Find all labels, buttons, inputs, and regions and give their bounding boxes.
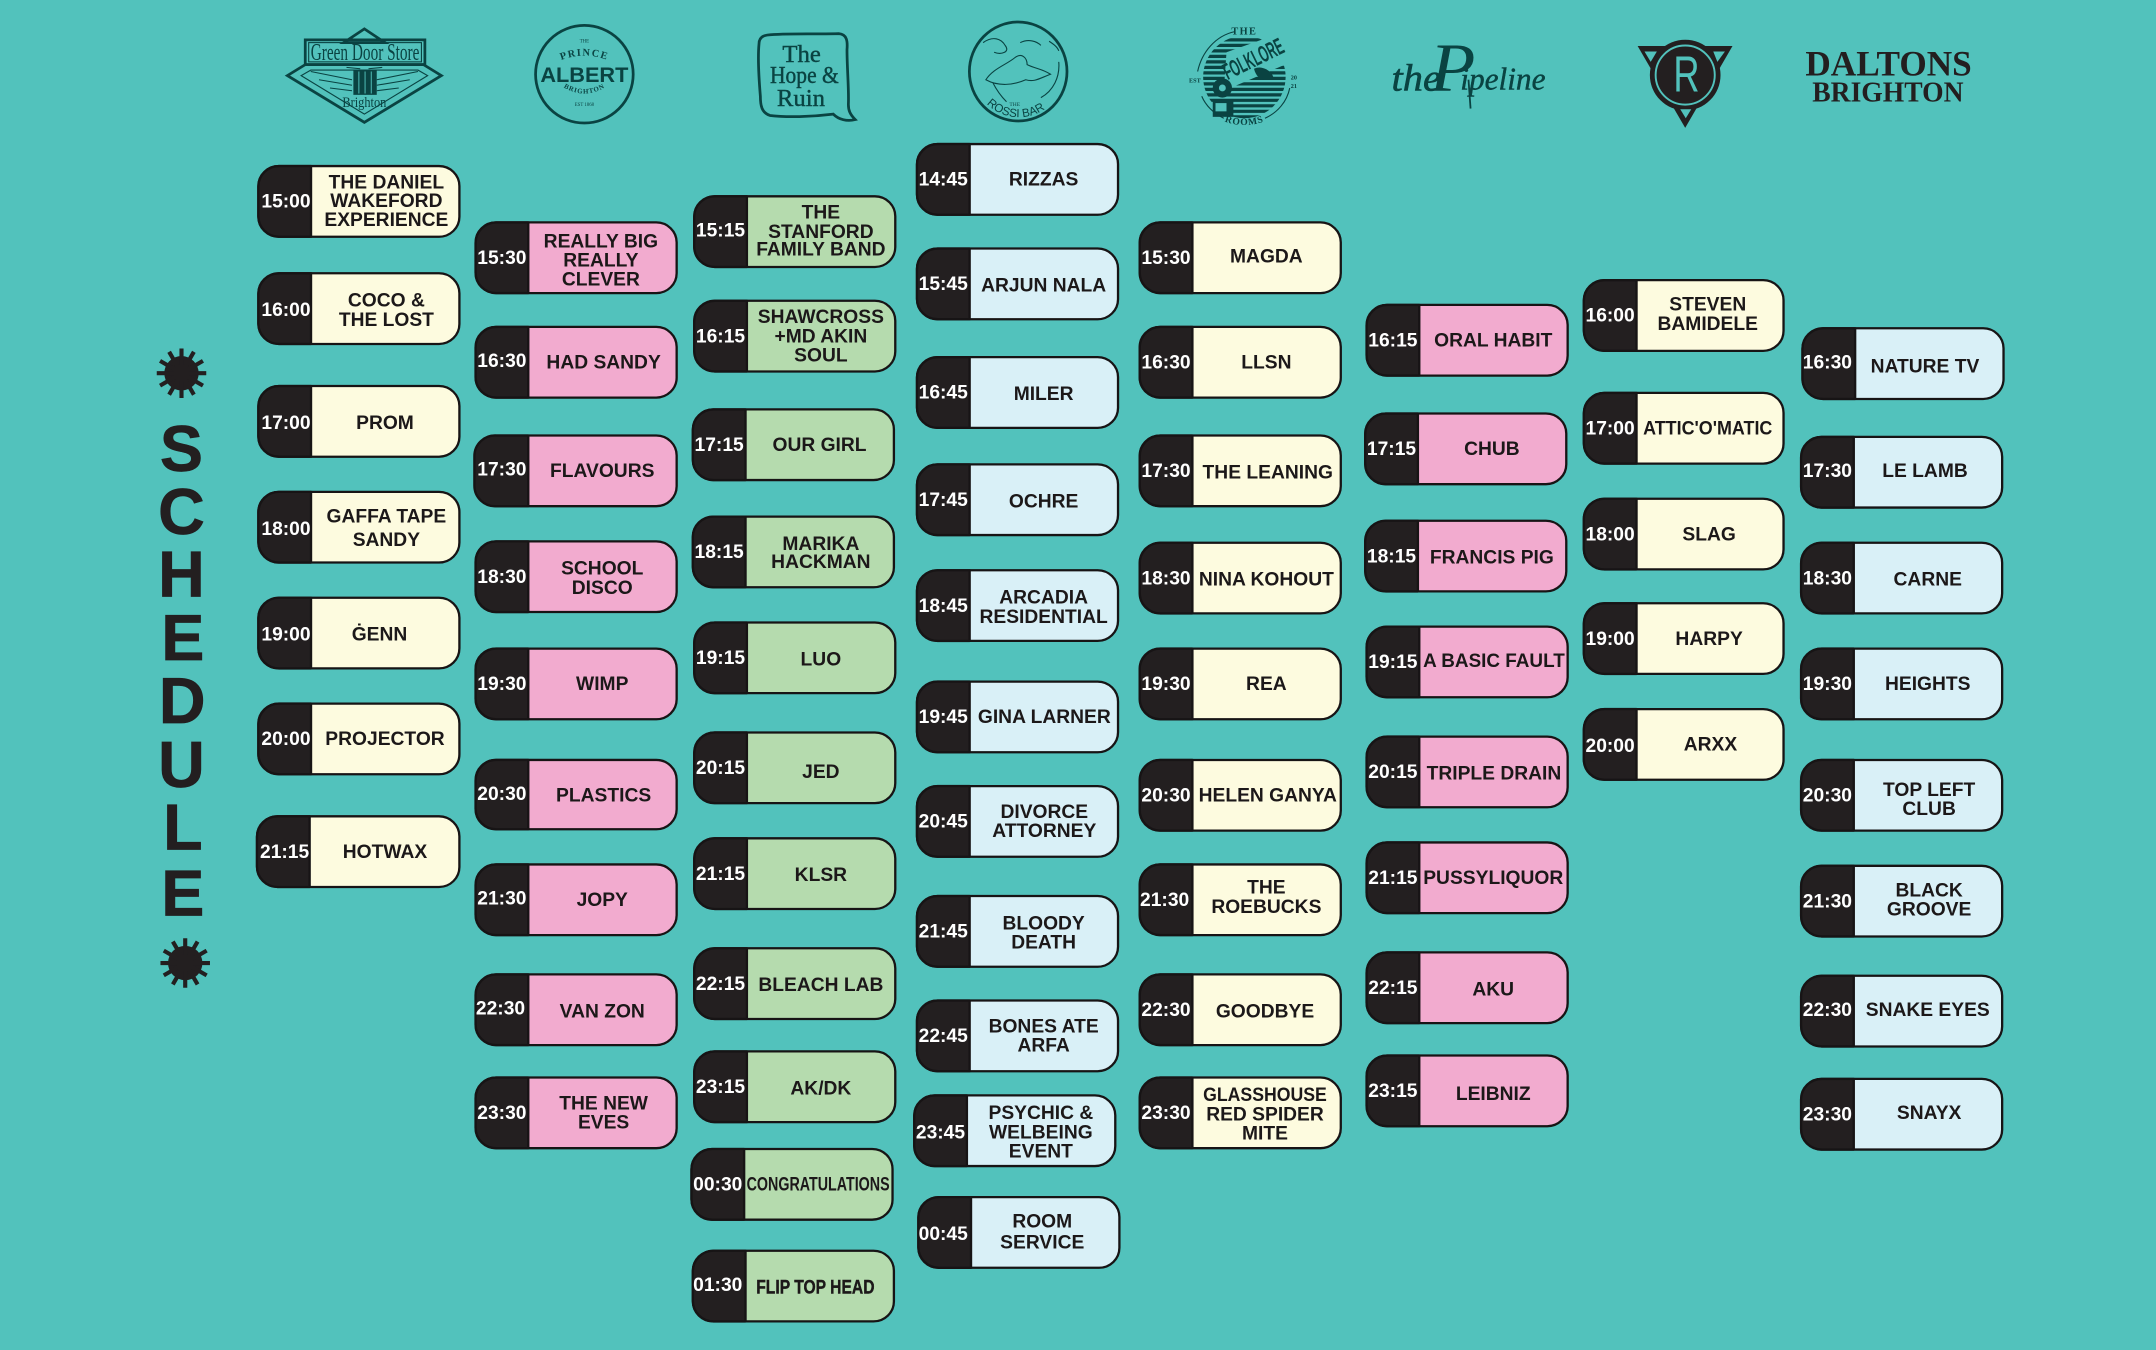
slot 20:00 Arxx <box>1584 709 1784 780</box>
slot 00:45 Room Service: ROOM <box>1012 1212 1072 1233</box>
logo: R triangle: R <box>1673 46 1700 103</box>
slot 18:30 School Disco: DISCO <box>572 578 633 599</box>
slot 22:30 Goodbye: 22:30 <box>1141 1000 1191 1021</box>
slot 16:15 Shawcross +MD Akin Soul: SOUL <box>794 346 848 367</box>
slot 15:00 The Daniel Wakeford Experience <box>258 166 459 237</box>
logo: Prince Albert <box>534 24 635 124</box>
slot 17:30 Le Lamb: 17:30 <box>1803 461 1852 482</box>
slot 22:15 Aku <box>1367 952 1568 1023</box>
slot 18:30 Nina Kohout: NINA KOHOUT <box>1199 570 1334 591</box>
slot 17:15 Our Girl: 17:15 <box>695 435 744 456</box>
slot 23:15 AK/DK: 23:15 <box>696 1077 745 1098</box>
slot 15:00 The Daniel Wakeford Experience: EXPERIENCE <box>324 210 449 231</box>
slot 17:15 Chub: 17:15 <box>1367 439 1416 460</box>
slot 01:30 Flip Top Head: 01:30 <box>693 1275 742 1296</box>
icon: bottom sun <box>160 938 210 988</box>
slot 17:00 Attic'O'Matic: 17:00 <box>1586 418 1635 439</box>
slot 17:15 Chub: CHUB <box>1464 439 1520 460</box>
slot 17:30 Flavours <box>474 435 677 506</box>
slot 15:30 Magda <box>1140 222 1341 293</box>
logo: The Folklore Rooms: EST <box>1189 77 1202 84</box>
logo: The Hope & Ruin <box>758 34 855 120</box>
slot 16:30 Had Sandy: 16:30 <box>477 351 526 372</box>
slot 18:00 Slag: 18:00 <box>1586 524 1635 545</box>
column: R venue <box>1584 280 1784 780</box>
slot 16:00 Steven Bamidele: STEVEN <box>1669 295 1746 316</box>
slot 23:30 The New Eves: EVES <box>578 1113 629 1134</box>
slot 17:30 Flavours: FLAVOURS <box>550 461 655 482</box>
slot 22:30 Van Zon: 22:30 <box>476 999 525 1020</box>
slot 23:45 Psychic & Welbeing Event: WELBEING <box>989 1122 1093 1143</box>
slot 23:45 Psychic & Welbeing Event: PSYCHIC & <box>988 1103 1093 1124</box>
slot 22:45 Bones Ate Arfa: 22:45 <box>919 1026 968 1047</box>
slot 19:30 Heights: 19:30 <box>1803 674 1852 695</box>
slot 20:15 Jed: 20:15 <box>696 758 745 779</box>
logo: The Hope & Ruin: Ruin <box>777 85 825 112</box>
slot 19:00 Harpy: HARPY <box>1675 629 1743 650</box>
column: Prince Albert <box>474 222 677 1148</box>
vertical heading: SCHEDULE <box>158 413 206 930</box>
slot 20:45 Divorce Attorney: ATTORNEY <box>992 821 1096 842</box>
slot 15:30 Really Big Really Clever: REALLY BIG <box>544 231 658 252</box>
slot 17:15 Our Girl: OUR GIRL <box>772 435 867 456</box>
logo: Daltons Brighton: DALTONS <box>1805 44 1972 84</box>
slot 19:30 Rea: REA <box>1246 674 1287 695</box>
slot 20:15 Triple Drain: 20:15 <box>1368 762 1418 783</box>
slot 18:30 Carne <box>1801 543 2002 613</box>
slot 20:30 Helen Ganya: 20:30 <box>1141 785 1191 806</box>
slot 20:30 Helen Ganya: HELEN GANYA <box>1199 785 1337 806</box>
slot 16:15 Shawcross +MD Akin Soul <box>694 301 895 371</box>
slot 20:30 Helen Ganya <box>1140 760 1341 831</box>
slot 21:30 Black Groove: BLACK <box>1895 880 1963 901</box>
slot 20:15 Jed: JED <box>802 762 840 783</box>
slot 20:15 Triple Drain <box>1367 737 1568 807</box>
slot 22:30 Snake Eyes <box>1801 976 2002 1046</box>
slot 23:15 AK/DK: AK/DK <box>790 1078 851 1099</box>
slot 21:30 Black Groove <box>1801 866 2002 936</box>
slot 15:15 The Stanford Family Band <box>694 196 895 267</box>
slot 21:15 Pussyliquor <box>1367 842 1568 913</box>
slot 16:15 Shawcross +MD Akin Soul: +MD AKIN <box>774 326 867 347</box>
slot 00:45 Room Service: SERVICE <box>1000 1232 1084 1253</box>
slot 18:45 Arcadia Residential: 18:45 <box>919 596 968 617</box>
slot 19:30 Wimp: 19:30 <box>477 674 526 695</box>
slot 18:15 Francis Pig: FRANCIS PIG <box>1430 548 1554 569</box>
slot 15:15 The Stanford Family Band: STANFORD <box>768 222 874 243</box>
slot 16:30 Had Sandy: HAD SANDY <box>546 352 661 373</box>
logo: Daltons Brighton: BRIGHTON <box>1812 78 1963 109</box>
slot 20:45 Divorce Attorney: 20:45 <box>919 812 968 833</box>
slot 21:30 The Roebucks: ROEBUCKS <box>1211 897 1322 918</box>
slot 19:15 Luo <box>694 622 895 693</box>
logo: Prince Albert: THE <box>580 40 589 45</box>
slot 20:30 Top Left Club: 20:30 <box>1803 785 1852 806</box>
slot 18:15 Marika Hackman: HACKMAN <box>771 552 871 573</box>
slot 20:30 Plastics: 20:30 <box>477 784 526 805</box>
slot 21:45 Bloody Death: 21:45 <box>919 922 968 943</box>
slot 16:00 Coco & The Lost: 16:00 <box>261 300 311 321</box>
slot 19:15 Luo: 19:15 <box>696 648 745 669</box>
slot 16:00 Steven Bamidele <box>1584 280 1784 351</box>
slot 14:45 Rizzas <box>917 144 1118 215</box>
slot 22:15 Bleach Lab <box>694 948 895 1019</box>
slot 17:00 Prom: PROM <box>356 413 414 434</box>
slot 00:45 Room Service: 00:45 <box>919 1224 968 1245</box>
slot 19:30 Rea <box>1140 649 1341 719</box>
vertical heading: SCHEDULE: E <box>161 602 204 674</box>
logo: The Pipeline <box>1392 30 1546 109</box>
slot 21:15 KLSR: 21:15 <box>696 864 745 885</box>
slot 17:15 Our Girl <box>693 409 894 480</box>
slot 20:45 Divorce Attorney <box>917 786 1118 857</box>
slot 16:15 Shawcross +MD Akin Soul: 16:15 <box>696 326 745 347</box>
slot 23:15 AK/DK <box>694 1051 895 1122</box>
slot 16:30 Nature TV <box>1802 328 2004 399</box>
slot 17:00 Attic'O'Matic <box>1584 393 1784 464</box>
slot 23:30 Snayx <box>1801 1079 2002 1150</box>
slot 17:45 Ochre: 17:45 <box>919 490 968 511</box>
slot 17:00 Prom: 17:00 <box>261 413 311 434</box>
slot 18:45 Arcadia Residential: ARCADIA <box>999 588 1088 609</box>
slot 17:30 Flavours: 17:30 <box>477 460 526 481</box>
slot 23:30 Glasshouse Red Spider Mite <box>1140 1078 1341 1148</box>
slot 16:00 Steven Bamidele: BAMIDELE <box>1658 314 1758 335</box>
slot 20:30 Top Left Club: TOP LEFT <box>1883 780 1976 801</box>
slot 16:45 Miler: MILER <box>1014 384 1074 405</box>
icon: top sun <box>157 348 206 398</box>
slot 22:30 Snake Eyes: SNAKE EYES <box>1866 1000 1990 1021</box>
slot 23:30 The New Eves: THE NEW <box>559 1093 649 1114</box>
slot 23:30 Snayx: 23:30 <box>1803 1104 1852 1125</box>
slot 18:15 Francis Pig: 18:15 <box>1367 546 1416 567</box>
slot 19:15 A Basic Fault: A BASIC FAULT <box>1423 651 1565 672</box>
slot 19:30 Heights <box>1801 649 2002 719</box>
slot 15:00 The Daniel Wakeford Experience: THE DANIEL <box>329 172 444 193</box>
slot 20:15 Jed <box>694 732 895 803</box>
slot 21:30 Jopy <box>476 864 677 935</box>
slot 21:30 The Roebucks: 21:30 <box>1140 890 1189 911</box>
column: The Rossi Bar <box>914 144 1119 1268</box>
logo: The Folklore Rooms: THE <box>1231 26 1257 37</box>
slot 19:30 Wimp: WIMP <box>576 674 629 695</box>
slot 20:30 Top Left Club <box>1801 760 2002 831</box>
slot 22:15 Aku: 22:15 <box>1368 978 1418 999</box>
slot 15:15 The Stanford Family Band: FAMILY BAND <box>756 240 886 261</box>
slot 16:15 Oral Habit: ORAL HABIT <box>1434 330 1553 351</box>
logo: Green Door Store: Green Door Store <box>311 40 419 66</box>
slot 18:30 Carne: 18:30 <box>1803 568 1852 589</box>
slot 23:15 Leibniz: 23:15 <box>1368 1081 1418 1102</box>
slot 17:30 Le Lamb <box>1801 437 2002 508</box>
logo: Prince Albert: ALBERT <box>540 63 628 87</box>
slot 16:30 LLSN: 16:30 <box>1141 352 1191 373</box>
logo: The Hope & Ruin: Hope & <box>770 62 839 89</box>
slot 20:45 Divorce Attorney: DIVORCE <box>1000 802 1088 823</box>
slot 21:15 Pussyliquor: PUSSYLIQUOR <box>1423 868 1563 889</box>
slot 21:15 Hotwax <box>257 816 459 887</box>
slot 16:00 Coco & The Lost: COCO & <box>348 291 425 312</box>
slot 17:30 Le Lamb: LE LAMB <box>1882 461 1968 482</box>
slot 18:30 Carne: CARNE <box>1894 570 1962 591</box>
slot 20:30 Plastics <box>476 760 677 829</box>
slot 20:00 Projector <box>258 704 459 774</box>
logo: The Folklore Rooms: ROOMS <box>1224 116 1262 126</box>
slot 18:45 Arcadia Residential: RESIDENTIAL <box>979 607 1108 628</box>
column: The Hope & Ruin <box>691 196 895 1321</box>
slot 23:45 Psychic & Welbeing Event: 23:45 <box>916 1122 965 1143</box>
slot 14:45 Rizzas: 14:45 <box>919 170 968 191</box>
logo: Daltons Brighton <box>1805 44 1972 109</box>
slot 17:15 Chub <box>1365 414 1566 484</box>
slot 23:15 Leibniz: LEIBNIZ <box>1456 1084 1531 1105</box>
slot 23:45 Psychic & Welbeing Event <box>914 1095 1115 1166</box>
slot 23:30 Glasshouse Red Spider Mite: GLASSHOUSE <box>1203 1085 1327 1106</box>
logo: Prince Albert: EST 1868 <box>575 103 595 108</box>
logo: The Rossi Bar <box>968 20 1068 122</box>
slot 21:15 Hotwax: HOTWAX <box>343 842 427 863</box>
slot 22:30 Goodbye <box>1140 974 1341 1045</box>
logo: The Pipeline: the <box>1392 58 1441 100</box>
slot 15:30 Magda: MAGDA <box>1230 247 1303 268</box>
slot 16:45 Miler <box>917 357 1118 428</box>
slot 21:45 Bloody Death: DEATH <box>1011 933 1076 954</box>
logo: R triangle <box>1638 40 1732 128</box>
slot 22:30 Goodbye: GOODBYE <box>1216 1001 1314 1022</box>
slot 15:15 The Stanford Family Band: 15:15 <box>696 220 745 241</box>
logo: The Folklore Rooms: 21 <box>1291 83 1297 90</box>
slot 20:00 Projector: 20:00 <box>261 729 311 750</box>
slot 17:45 Ochre: OCHRE <box>1009 491 1079 512</box>
logo: The Rossi Bar: ROSSI BAR <box>987 98 1045 118</box>
slot 19:00 Harpy: 19:00 <box>1586 629 1635 650</box>
slot 19:30 Heights: HEIGHTS <box>1885 674 1971 695</box>
logo: The Pipeline: P <box>1429 30 1475 106</box>
slot 18:15 Marika Hackman: 18:15 <box>695 542 744 563</box>
slot 19:00 Harpy <box>1584 603 1784 674</box>
slot 18:00 Gaffa Tape Sandy: 18:00 <box>261 519 311 540</box>
vertical heading: SCHEDULE: E <box>161 858 204 930</box>
slot 19:30 Rea: 19:30 <box>1141 674 1191 695</box>
slot 19:15 A Basic Fault: 19:15 <box>1368 652 1418 673</box>
logo: Green Door Store: Brighton <box>342 95 387 111</box>
logo: Green Door Store <box>287 29 441 122</box>
slot 23:30 The New Eves: 23:30 <box>477 1103 526 1124</box>
slot 16:30 Nature TV: NATURE TV <box>1871 357 1979 378</box>
slot 18:00 Gaffa Tape Sandy: GAFFA TAPE <box>327 506 446 527</box>
logo: The Pipeline: ipeline <box>1460 61 1545 96</box>
slot 20:00 Arxx: ARXX <box>1684 735 1737 756</box>
slot 19:00 Genn: ĠENN <box>352 625 407 646</box>
slot 22:45 Bones Ate Arfa <box>917 1001 1118 1071</box>
logo: The Folklore Rooms <box>1189 26 1297 126</box>
column: Green Door Store <box>257 166 459 887</box>
slot 17:30 The Leaning: 17:30 <box>1141 461 1191 482</box>
slot 16:15 Shawcross +MD Akin Soul: SHAWCROSS <box>758 307 884 328</box>
slot 19:45 Gina Larner: 19:45 <box>919 707 968 728</box>
slot 16:30 Nature TV: 16:30 <box>1803 352 1852 373</box>
slot 01:30 Flip Top Head: FLIP TOP HEAD <box>756 1278 875 1299</box>
logo: Prince Albert: BRIGHTON <box>564 84 604 94</box>
slot 18:00 Slag <box>1584 499 1784 569</box>
slot 22:15 Bleach Lab: 22:15 <box>696 974 745 995</box>
slot 18:30 School Disco: SCHOOL <box>561 559 644 580</box>
slot 18:15 Francis Pig <box>1365 521 1566 591</box>
slot 15:15 The Stanford Family Band: THE <box>802 203 840 224</box>
slot 21:30 Jopy: JOPY <box>577 890 628 911</box>
slot 15:00 The Daniel Wakeford Experience: WAKEFORD <box>330 191 443 212</box>
slot 18:30 Nina Kohout <box>1140 543 1341 613</box>
slot 23:45 Psychic & Welbeing Event: EVENT <box>1009 1142 1073 1163</box>
slot 22:30 Van Zon <box>476 974 677 1045</box>
slot 19:15 Luo: LUO <box>801 649 841 670</box>
slot 20:15 Triple Drain: TRIPLE DRAIN <box>1427 763 1561 784</box>
slot 21:30 Black Groove: 21:30 <box>1803 891 1852 912</box>
slot 00:30 Congratulations: CONGRATULATIONS <box>747 1175 890 1196</box>
slot 17:30 The Leaning <box>1140 436 1341 506</box>
slot 17:00 Attic'O'Matic: ATTIC'O'MATIC <box>1643 418 1772 439</box>
slot 18:00 Gaffa Tape Sandy <box>258 492 459 563</box>
slot 19:45 Gina Larner: GINA LARNER <box>978 707 1111 728</box>
slot 15:45 Arjun Nala: 15:45 <box>919 274 968 295</box>
slot 19:45 Gina Larner <box>917 682 1118 752</box>
slot 14:45 Rizzas: RIZZAS <box>1009 170 1079 191</box>
slot 22:45 Bones Ate Arfa: BONES ATE <box>989 1016 1099 1037</box>
slot 18:00 Gaffa Tape Sandy: SANDY <box>353 530 420 551</box>
slot 16:15 Oral Habit <box>1367 305 1568 376</box>
slot 21:15 KLSR: KLSR <box>795 865 847 886</box>
logo: The Folklore Rooms: 20 <box>1291 75 1297 82</box>
slot 18:00 Slag: SLAG <box>1682 524 1736 545</box>
slot 22:30 Van Zon: VAN ZON <box>560 1001 645 1022</box>
slot 15:30 Really Big Really Clever: REALLY <box>563 251 639 272</box>
slot 19:00 Genn <box>258 598 459 668</box>
slot 01:30 Flip Top Head <box>693 1251 894 1321</box>
slot 20:00 Projector: PROJECTOR <box>325 729 445 750</box>
logo: The Rossi Bar: THE <box>1009 102 1021 108</box>
slot 20:30 Top Left Club: CLUB <box>1902 799 1956 820</box>
slot 15:30 Really Big Really Clever: CLEVER <box>562 269 640 290</box>
logo: Prince Albert: PRINCE <box>559 48 608 60</box>
slot 16:45 Miler: 16:45 <box>919 383 968 404</box>
slot 20:30 Plastics: PLASTICS <box>556 785 651 806</box>
slot 00:30 Congratulations <box>691 1149 893 1220</box>
vertical heading: SCHEDULE: L <box>163 792 203 864</box>
slot 19:15 A Basic Fault <box>1367 627 1568 697</box>
slot 21:15 Hotwax: 21:15 <box>260 842 310 863</box>
slot 00:30 Congratulations: 00:30 <box>693 1175 742 1196</box>
slot 17:45 Ochre <box>917 464 1118 535</box>
slot 18:15 Marika Hackman <box>693 517 894 587</box>
vertical heading: SCHEDULE: S <box>160 413 203 485</box>
slot 23:15 Leibniz <box>1367 1056 1568 1126</box>
vertical heading: SCHEDULE: D <box>159 665 206 737</box>
slot 16:00 Coco & The Lost <box>258 273 459 344</box>
slot 23:30 Glasshouse Red Spider Mite: RED SPIDER <box>1206 1104 1324 1125</box>
slot 18:30 Nina Kohout: 18:30 <box>1141 568 1191 589</box>
slot 18:15 Marika Hackman: MARIKA <box>782 534 859 555</box>
slot 15:30 Magda: 15:30 <box>1141 248 1191 269</box>
vertical heading: SCHEDULE: C <box>158 476 205 548</box>
slot 22:15 Aku: AKU <box>1472 979 1514 1000</box>
slot 16:15 Oral Habit: 16:15 <box>1368 330 1418 351</box>
slot 16:00 Steven Bamidele: 16:00 <box>1586 306 1635 327</box>
slot 23:30 Snayx: SNAYX <box>1897 1103 1962 1124</box>
slot 16:30 LLSN <box>1140 327 1341 398</box>
column: The Pipeline <box>1365 305 1568 1126</box>
slot 21:15 KLSR <box>694 838 895 909</box>
slot 15:45 Arjun Nala: ARJUN NALA <box>981 275 1106 296</box>
column: Daltons Brighton <box>1801 328 2004 1150</box>
slot 21:30 The Roebucks <box>1140 864 1341 935</box>
slot 21:45 Bloody Death: BLOODY <box>1002 913 1085 934</box>
slot 18:30 School Disco: 18:30 <box>477 567 526 588</box>
slot 15:30 Really Big Really Clever <box>476 222 677 293</box>
slot 21:45 Bloody Death <box>917 896 1118 967</box>
slot 16:00 Coco & The Lost: THE LOST <box>339 310 434 331</box>
slot 18:30 School Disco <box>476 541 677 612</box>
slot 19:00 Genn: 19:00 <box>261 625 311 646</box>
slot 21:30 Jopy: 21:30 <box>477 889 526 910</box>
slot 22:45 Bones Ate Arfa: ARFA <box>1017 1036 1070 1057</box>
slot 23:30 Glasshouse Red Spider Mite: MITE <box>1242 1124 1288 1145</box>
slot 15:00 The Daniel Wakeford Experience: 15:00 <box>261 192 311 213</box>
slot 20:00 Arxx: 20:00 <box>1586 736 1635 757</box>
slot 22:15 Bleach Lab: BLEACH LAB <box>758 975 883 996</box>
slot 15:30 Really Big Really Clever: 15:30 <box>477 248 526 269</box>
slot 22:30 Snake Eyes: 22:30 <box>1803 1000 1852 1021</box>
vertical heading: SCHEDULE: H <box>158 539 205 611</box>
slot 21:15 Pussyliquor: 21:15 <box>1368 868 1418 889</box>
slot 15:45 Arjun Nala <box>917 249 1118 319</box>
slot 16:30 Had Sandy <box>476 327 677 398</box>
vertical heading: SCHEDULE: U <box>158 729 205 801</box>
slot 17:00 Prom <box>258 386 459 457</box>
slot 21:30 Black Groove: GROOVE <box>1887 900 1972 921</box>
slot 21:30 The Roebucks: THE <box>1247 878 1286 899</box>
slot 16:30 LLSN: LLSN <box>1241 352 1291 373</box>
slot 00:45 Room Service <box>918 1197 1119 1268</box>
column: The Folklore Rooms <box>1140 222 1341 1148</box>
logo: The Folklore Rooms: FOLKLORE <box>1219 33 1288 85</box>
slot 19:30 Wimp <box>476 649 677 719</box>
slot 23:30 The New Eves <box>476 1078 677 1148</box>
logo: The Hope & Ruin: The <box>782 41 821 68</box>
slot 18:45 Arcadia Residential <box>917 570 1118 641</box>
slot 23:30 Glasshouse Red Spider Mite: 23:30 <box>1141 1103 1191 1124</box>
slot 17:30 The Leaning: THE LEANING <box>1203 462 1333 483</box>
